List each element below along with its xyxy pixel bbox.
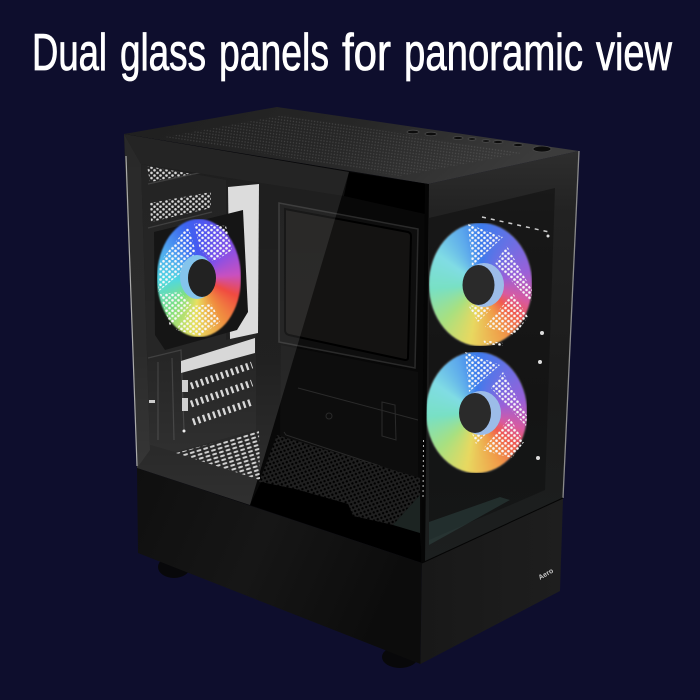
rear vent lower (150, 192, 211, 222)
teal floor reflection (429, 497, 510, 545)
right upper RGB fan (429, 223, 532, 346)
left fan hub (188, 259, 216, 297)
title: Dual (32, 24, 107, 82)
right end of floor (393, 495, 420, 533)
base seam (422, 498, 563, 563)
floor white mesh (176, 431, 260, 480)
white vent glints (482, 217, 550, 460)
PSU shroud front (250, 482, 422, 563)
title: panoramic (404, 24, 583, 82)
PCI white bar (181, 338, 255, 373)
title: view (596, 24, 672, 82)
foot: right (382, 646, 418, 668)
pillar glints (422, 440, 424, 500)
top black band (344, 172, 428, 214)
right lower RGB fan (426, 352, 527, 473)
upper fan hub crescent (464, 263, 504, 307)
title: glass (120, 24, 206, 82)
front IO ports (407, 130, 551, 152)
left edge highlight (126, 156, 137, 466)
title: for (342, 24, 391, 82)
right edge highlight (563, 151, 579, 498)
left fan hub crescent (180, 255, 214, 299)
rear frame lines (148, 170, 212, 440)
upper fan dots (468, 224, 532, 346)
top frame band (124, 134, 349, 196)
PCI slot ticks (191, 365, 252, 422)
right glass panel (422, 151, 579, 563)
plate screw (182, 430, 186, 432)
rear vent top (147, 166, 192, 182)
left fan dots (158, 223, 232, 336)
title: panels (219, 24, 329, 82)
left glass panel interior (124, 134, 428, 563)
top panel (124, 107, 579, 184)
top mesh vent (165, 115, 522, 176)
lower fan hub crescent (461, 391, 501, 435)
left pillar (124, 134, 150, 468)
title (32, 24, 672, 82)
motherboard tray cutout (285, 209, 411, 360)
left RGB fan (157, 219, 241, 337)
right inner structure (429, 188, 555, 540)
PCI slot tabs (182, 380, 188, 411)
product: PC case (124, 107, 579, 668)
brand logo: Aero (538, 568, 555, 582)
foot: left (158, 556, 190, 578)
lower panel details (284, 388, 418, 466)
white column (228, 184, 259, 339)
rear plate (141, 164, 256, 452)
motherboard tray surround (279, 203, 418, 368)
upper fan hub (462, 265, 494, 305)
lower fan dots (465, 352, 527, 458)
left fan frame (154, 210, 248, 350)
lower fan hub (459, 393, 491, 433)
rear latch (149, 400, 155, 403)
tray lower panel (280, 345, 418, 486)
base front panel (137, 468, 422, 664)
base side panel (420, 498, 563, 664)
glass reflection (124, 134, 349, 505)
front corner pillar (421, 184, 429, 563)
floor dark mesh (259, 435, 420, 525)
